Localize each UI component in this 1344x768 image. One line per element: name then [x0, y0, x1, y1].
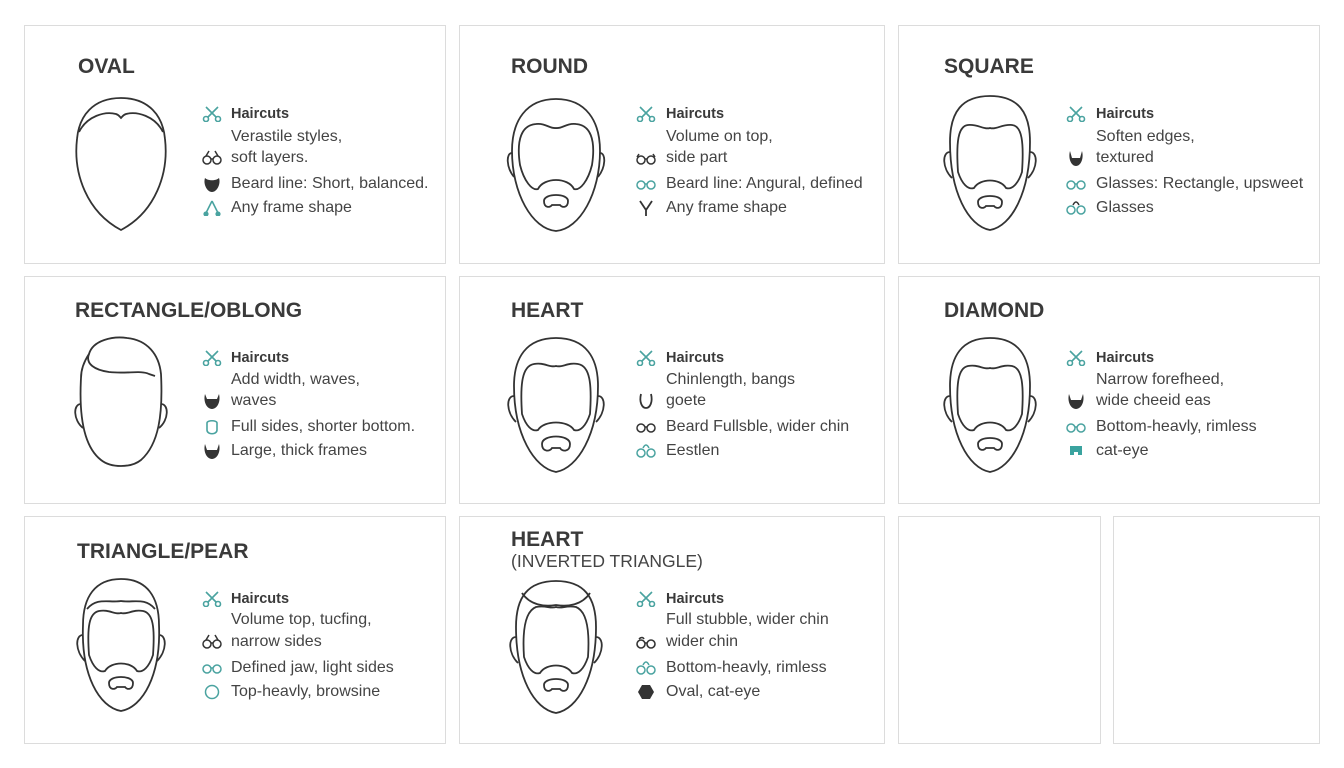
title: square: SQUARE: [944, 55, 1034, 78]
face: triangle: [76, 578, 166, 712]
icon: glasses: [1066, 201, 1086, 215]
icon: hair teal: [206, 420, 218, 434]
text: square: Haircuts: [1096, 106, 1154, 122]
text: heart inverted: Full stubble, wider chin: [666, 611, 829, 628]
text: round: Any frame shape: [666, 199, 787, 216]
title: rectangle: RECTANGLE/OBLONG: [75, 299, 302, 322]
icon: glasses teal: [202, 660, 222, 676]
icon: glasses: [636, 154, 656, 165]
text: triangle: [202, 591, 394, 700]
text: rectangle: [202, 350, 415, 459]
icon: beard: [1068, 394, 1084, 409]
icon: glasses teal: [636, 180, 656, 190]
face: diamond: [943, 337, 1037, 473]
icon: beard: [1069, 151, 1083, 166]
text: oval: [202, 106, 428, 216]
panel: oval: [24, 25, 446, 264]
text: round: [636, 106, 863, 216]
panel: diamond: [898, 276, 1320, 504]
face: heart inverted: [509, 580, 603, 714]
icon: glasses: [636, 423, 656, 433]
icon: scissors: [202, 591, 222, 607]
text: diamond: Haircuts: [1096, 350, 1154, 366]
panel: rectangle: [24, 276, 446, 504]
icon: glasses: [202, 634, 222, 650]
text: diamond: [1066, 350, 1257, 459]
text: square: Glasses: [1096, 199, 1154, 216]
subtitle: inverted triangle: (INVERTED TRIANGLE): [511, 551, 703, 571]
icon: hexagon: [636, 684, 656, 700]
face: oval: [75, 97, 167, 231]
panel: triangle: [24, 516, 446, 744]
text: rectangle: Large, thick frames: [231, 442, 367, 459]
text: heart: Beard Fullsble, wider chin: [666, 418, 849, 435]
title: triangle: TRIANGLE/PEAR: [77, 540, 249, 563]
icon: beard: [204, 178, 220, 192]
text: oval: Any frame shape: [231, 199, 352, 216]
icon: scissors: [202, 106, 222, 122]
text: round: Haircuts: [666, 106, 724, 122]
icon: scissors: [1066, 106, 1086, 122]
icon: frame: [203, 200, 221, 216]
title: heart inverted: HEART: [511, 528, 583, 551]
text: diamond: Bottom-heavly, rimless: [1096, 418, 1257, 435]
text: diamond: Narrow forefheed,: [1096, 371, 1224, 388]
text: square: textured: [1096, 149, 1154, 166]
text: square: Soften edges,: [1096, 128, 1195, 145]
text: oval: Haircuts: [231, 106, 289, 122]
text: heart: Haircuts: [666, 350, 724, 366]
icon: scissors: [636, 106, 656, 122]
icon: glasses: [202, 150, 222, 165]
title: diamond: DIAMOND: [944, 299, 1044, 322]
text: square: Glasses: Rectangle, upsweet: [1096, 175, 1303, 192]
icon: scissors: [636, 350, 656, 366]
text: triangle: Defined jaw, light sides: [231, 659, 394, 676]
title: round: ROUND: [511, 55, 588, 78]
face: round: [506, 98, 606, 232]
text: heart: Eestlen: [666, 442, 719, 459]
icon: circle teal: [202, 684, 222, 700]
text: rectangle: Full sides, shorter bottom.: [231, 418, 415, 435]
text: heart: goete: [666, 392, 706, 409]
text: oval: Verastile styles,: [231, 128, 342, 145]
text: rectangle: Add width, waves,: [231, 371, 360, 388]
text: rectangle: Haircuts: [231, 350, 289, 366]
face: heart: [507, 337, 605, 473]
text: heart inverted: [635, 585, 875, 705]
panel: heart: [459, 276, 885, 504]
title: oval: OVAL: [78, 55, 135, 78]
text: triangle: Volume top, tucfing,: [231, 611, 372, 628]
icon: beard outline: [639, 394, 653, 409]
icon: beard: [204, 444, 220, 459]
panel: empty 2: [1113, 516, 1320, 744]
icon: scissors: [202, 350, 222, 366]
panel: square: [898, 25, 1320, 264]
icon: glasses teal: [636, 444, 656, 458]
text: rectangle: waves: [231, 392, 276, 409]
icon: scissors: [1066, 350, 1086, 366]
panel: round: [459, 25, 885, 264]
icon: scissors dark: [639, 200, 653, 216]
text: round: side part: [666, 149, 727, 166]
text: heart: Chinlength, bangs: [666, 371, 795, 388]
text: triangle: narrow sides: [231, 633, 322, 650]
text: diamond: wide cheeid eas: [1096, 392, 1211, 409]
face: rectangle: [74, 336, 168, 467]
text: heart inverted: Haircuts: [666, 591, 724, 607]
text: heart inverted: wider chin: [666, 633, 738, 650]
panel: heart inverted: [459, 516, 885, 744]
title: heart: HEART: [511, 299, 583, 322]
text: oval: soft layers.: [231, 149, 308, 166]
text: square: [1066, 106, 1304, 216]
face: square: [943, 95, 1037, 231]
text: heart inverted: Oval, cat-eye: [666, 683, 760, 700]
icon: glasses teal: [1066, 423, 1086, 433]
text: triangle: Top-heavly, browsine: [231, 683, 380, 700]
text: diamond: cat-eye: [1096, 442, 1148, 459]
panel: empty 1: [898, 516, 1101, 744]
text: heart inverted: Bottom-heavly, rimless: [666, 659, 827, 676]
icon: cat-eye teal: [1070, 446, 1082, 455]
text: round: Beard line: Angural, defined: [666, 175, 863, 192]
text: round: Volume on top,: [666, 128, 773, 145]
icon: scissors: [636, 591, 656, 607]
icon: beard: [204, 394, 220, 409]
text: oval: Beard line: Short, balanced.: [231, 175, 428, 192]
text: triangle: Haircuts: [231, 591, 289, 607]
text: heart: [636, 350, 849, 459]
icon: glasses teal: [636, 660, 656, 676]
icon: glasses teal: [1066, 180, 1086, 190]
icon: glasses: [636, 634, 656, 650]
